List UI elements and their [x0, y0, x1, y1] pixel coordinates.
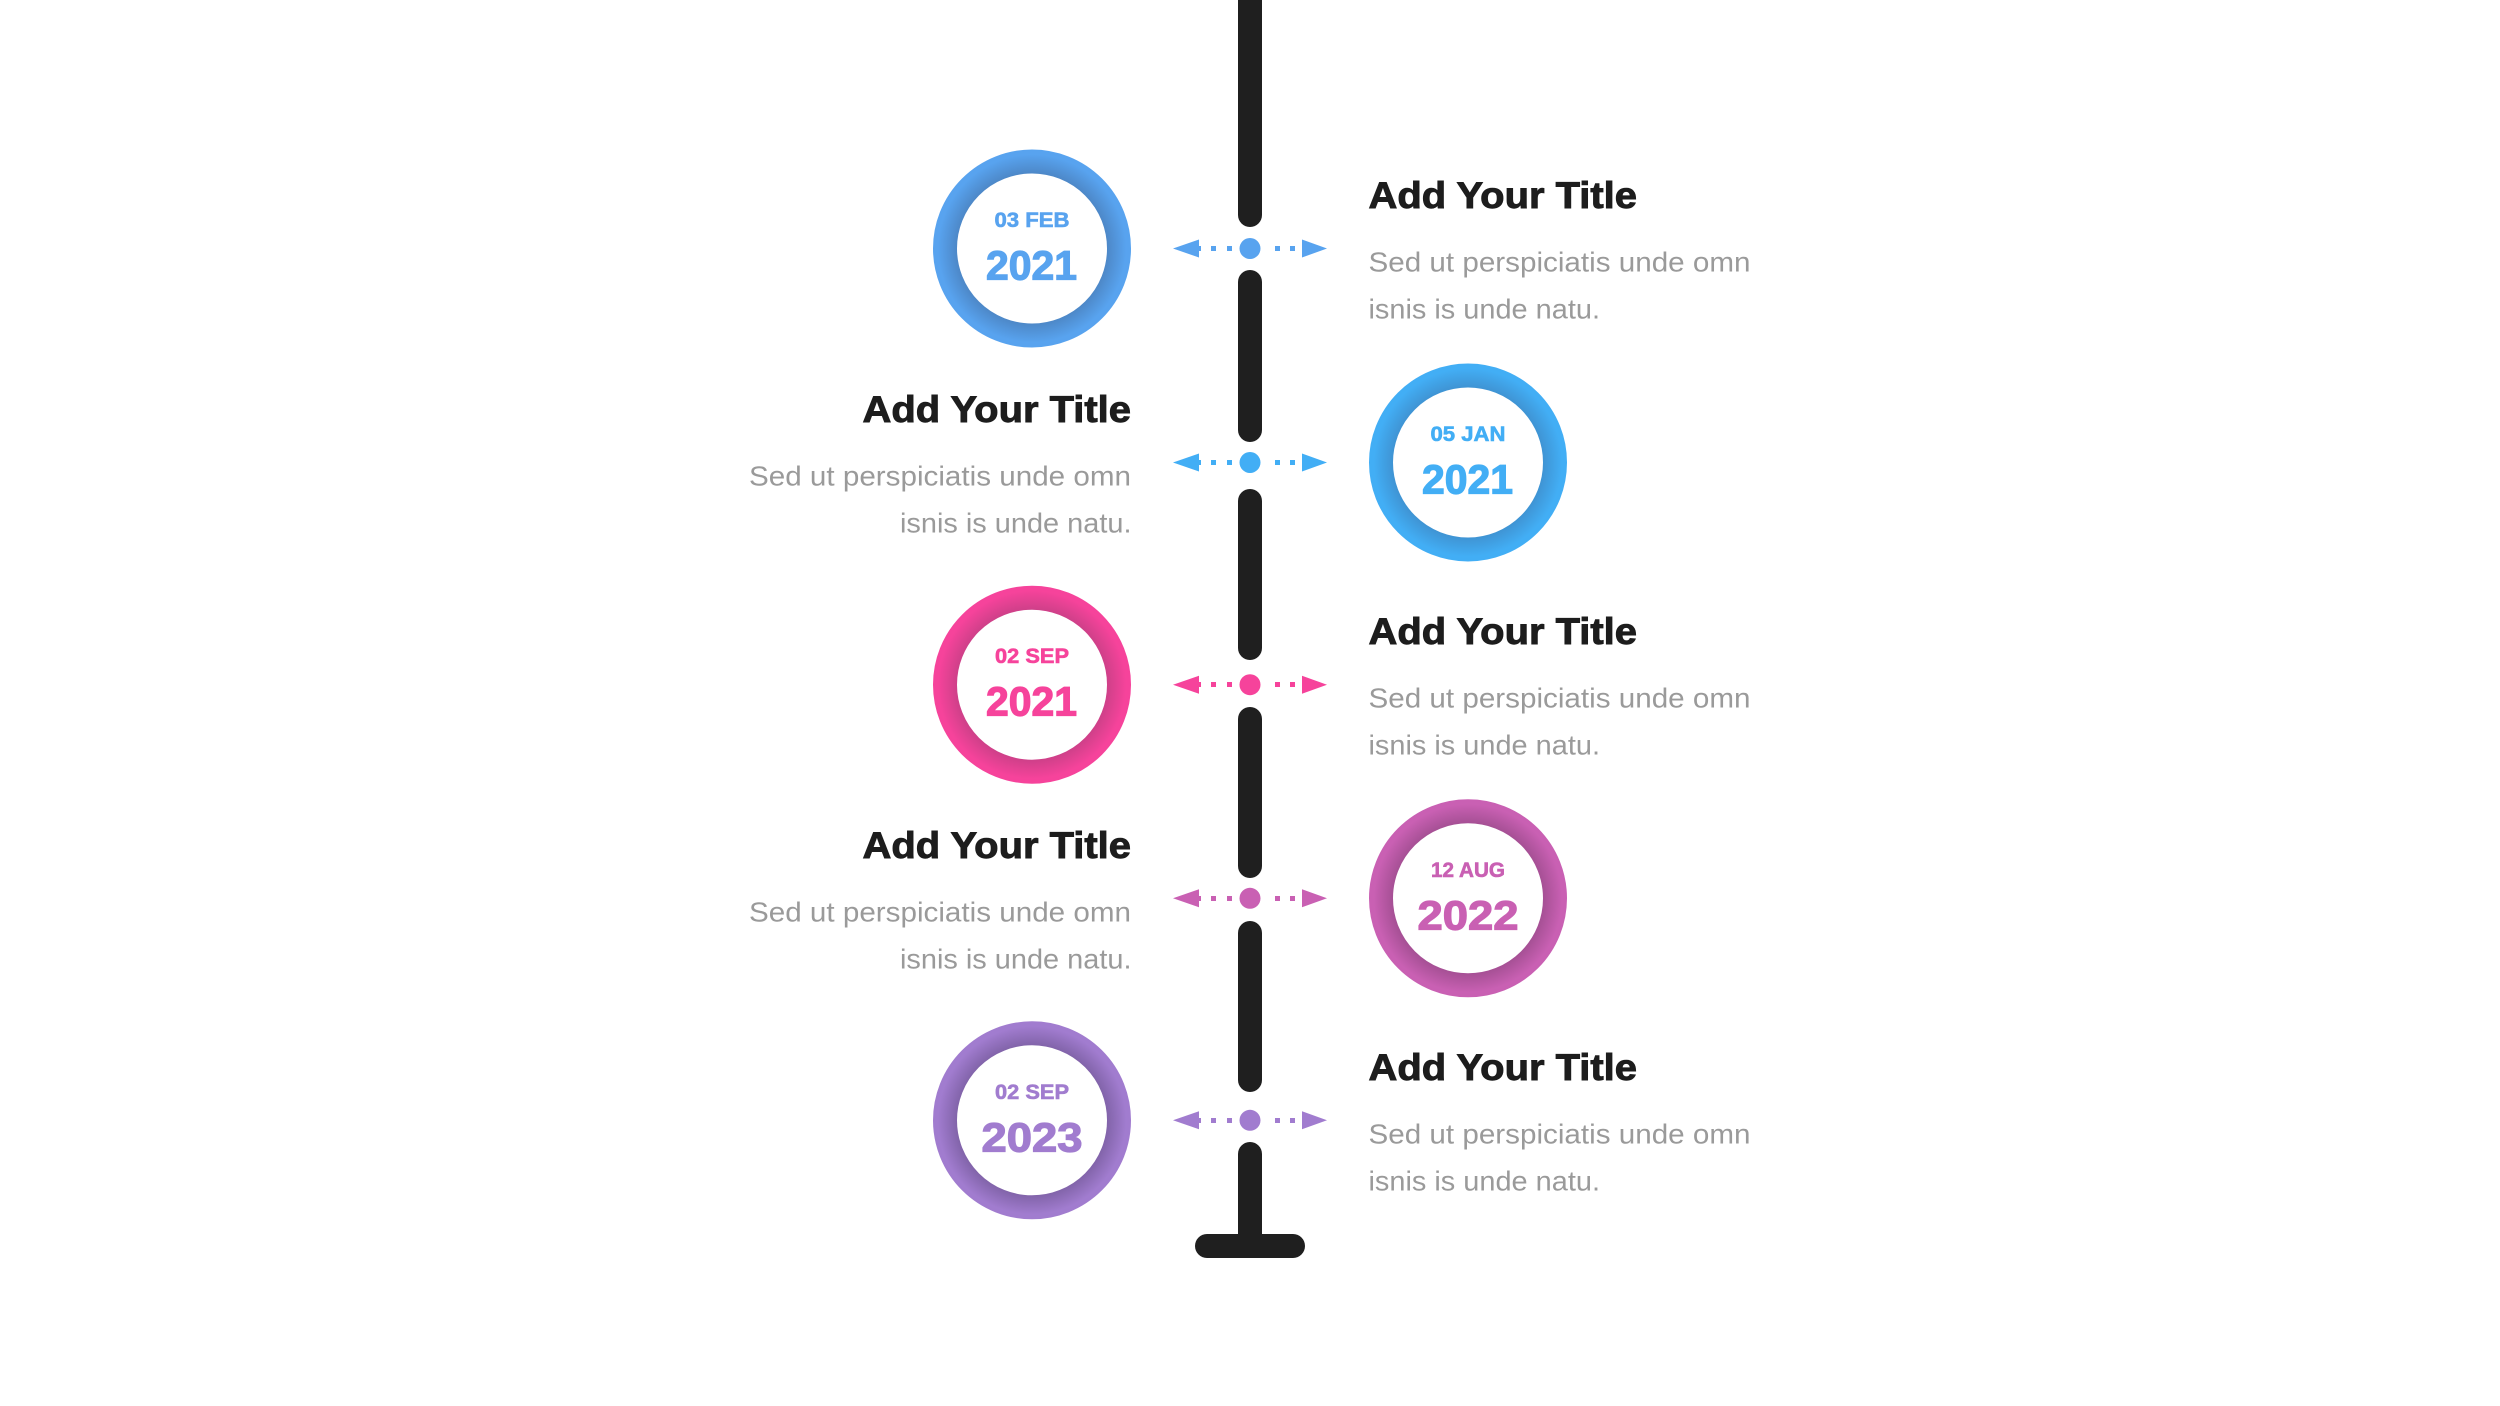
text block 3: isnis is unde natu. [1368, 730, 1600, 760]
text block 2: Add Your Title [862, 389, 1131, 430]
date badge 4: 2022 [1418, 892, 1518, 938]
text block 1: Sed ut perspiciatis unde omn [1368, 246, 1750, 278]
text block 4: Add Your Title [862, 825, 1131, 866]
milestone 1: 03 FEB 2021 [945, 162, 1750, 336]
text block 4: isnis is unde natu. [900, 944, 1132, 974]
text block 5: isnis is unde natu. [1368, 1166, 1600, 1196]
date badge 4 [1381, 811, 1555, 985]
milestone 5: 02 SEP 2023 [945, 1033, 1750, 1207]
date badge 5: 2023 [982, 1114, 1082, 1160]
text block 4 [749, 825, 1132, 974]
text block 5: Sed ut perspiciatis unde omn [1368, 1118, 1750, 1150]
text block 3 [1368, 611, 1750, 760]
text block 2: Sed ut perspiciatis unde omn [749, 460, 1131, 492]
date badge 5: 02 SEP [995, 1081, 1069, 1104]
text block 3: Sed ut perspiciatis unde omn [1368, 682, 1750, 714]
date badge 1: 03 FEB [994, 209, 1070, 232]
date badge 2 [1381, 376, 1555, 550]
date badge 1: 2021 [986, 242, 1077, 288]
text block 2 [749, 389, 1132, 538]
date badge 4: 12 AUG [1431, 859, 1505, 882]
text block 1 [1368, 175, 1750, 324]
text block 5: Add Your Title [1368, 1047, 1637, 1088]
text block 3: Add Your Title [1368, 611, 1637, 652]
text block 1: isnis is unde natu. [1368, 294, 1600, 324]
date badge 3: 02 SEP [995, 645, 1069, 668]
date badge 3 [945, 598, 1119, 772]
connector arrows 2 [1173, 452, 1327, 473]
date badge 1 [945, 162, 1119, 336]
connector arrows 1 [1173, 238, 1327, 259]
text block 1: Add Your Title [1368, 175, 1637, 216]
date badge 5 [945, 1033, 1119, 1207]
milestone 2: 05 JAN 2021 [749, 376, 1555, 550]
connector arrows 5 [1173, 1110, 1327, 1131]
milestone 4: 12 AUG 2022 [749, 811, 1555, 985]
text block 4: Sed ut perspiciatis unde omn [749, 896, 1131, 928]
date badge 2: 05 JAN [1430, 423, 1506, 446]
text block 2: isnis is unde natu. [900, 508, 1132, 538]
timeline spine [1195, 0, 1305, 1258]
connector arrows 3 [1173, 674, 1327, 695]
date badge 2: 2021 [1422, 456, 1513, 502]
date badge 3: 2021 [986, 678, 1077, 724]
connector arrows 4 [1173, 888, 1327, 909]
text block 5 [1368, 1047, 1750, 1196]
milestone 3: 02 SEP 2021 [945, 598, 1750, 772]
